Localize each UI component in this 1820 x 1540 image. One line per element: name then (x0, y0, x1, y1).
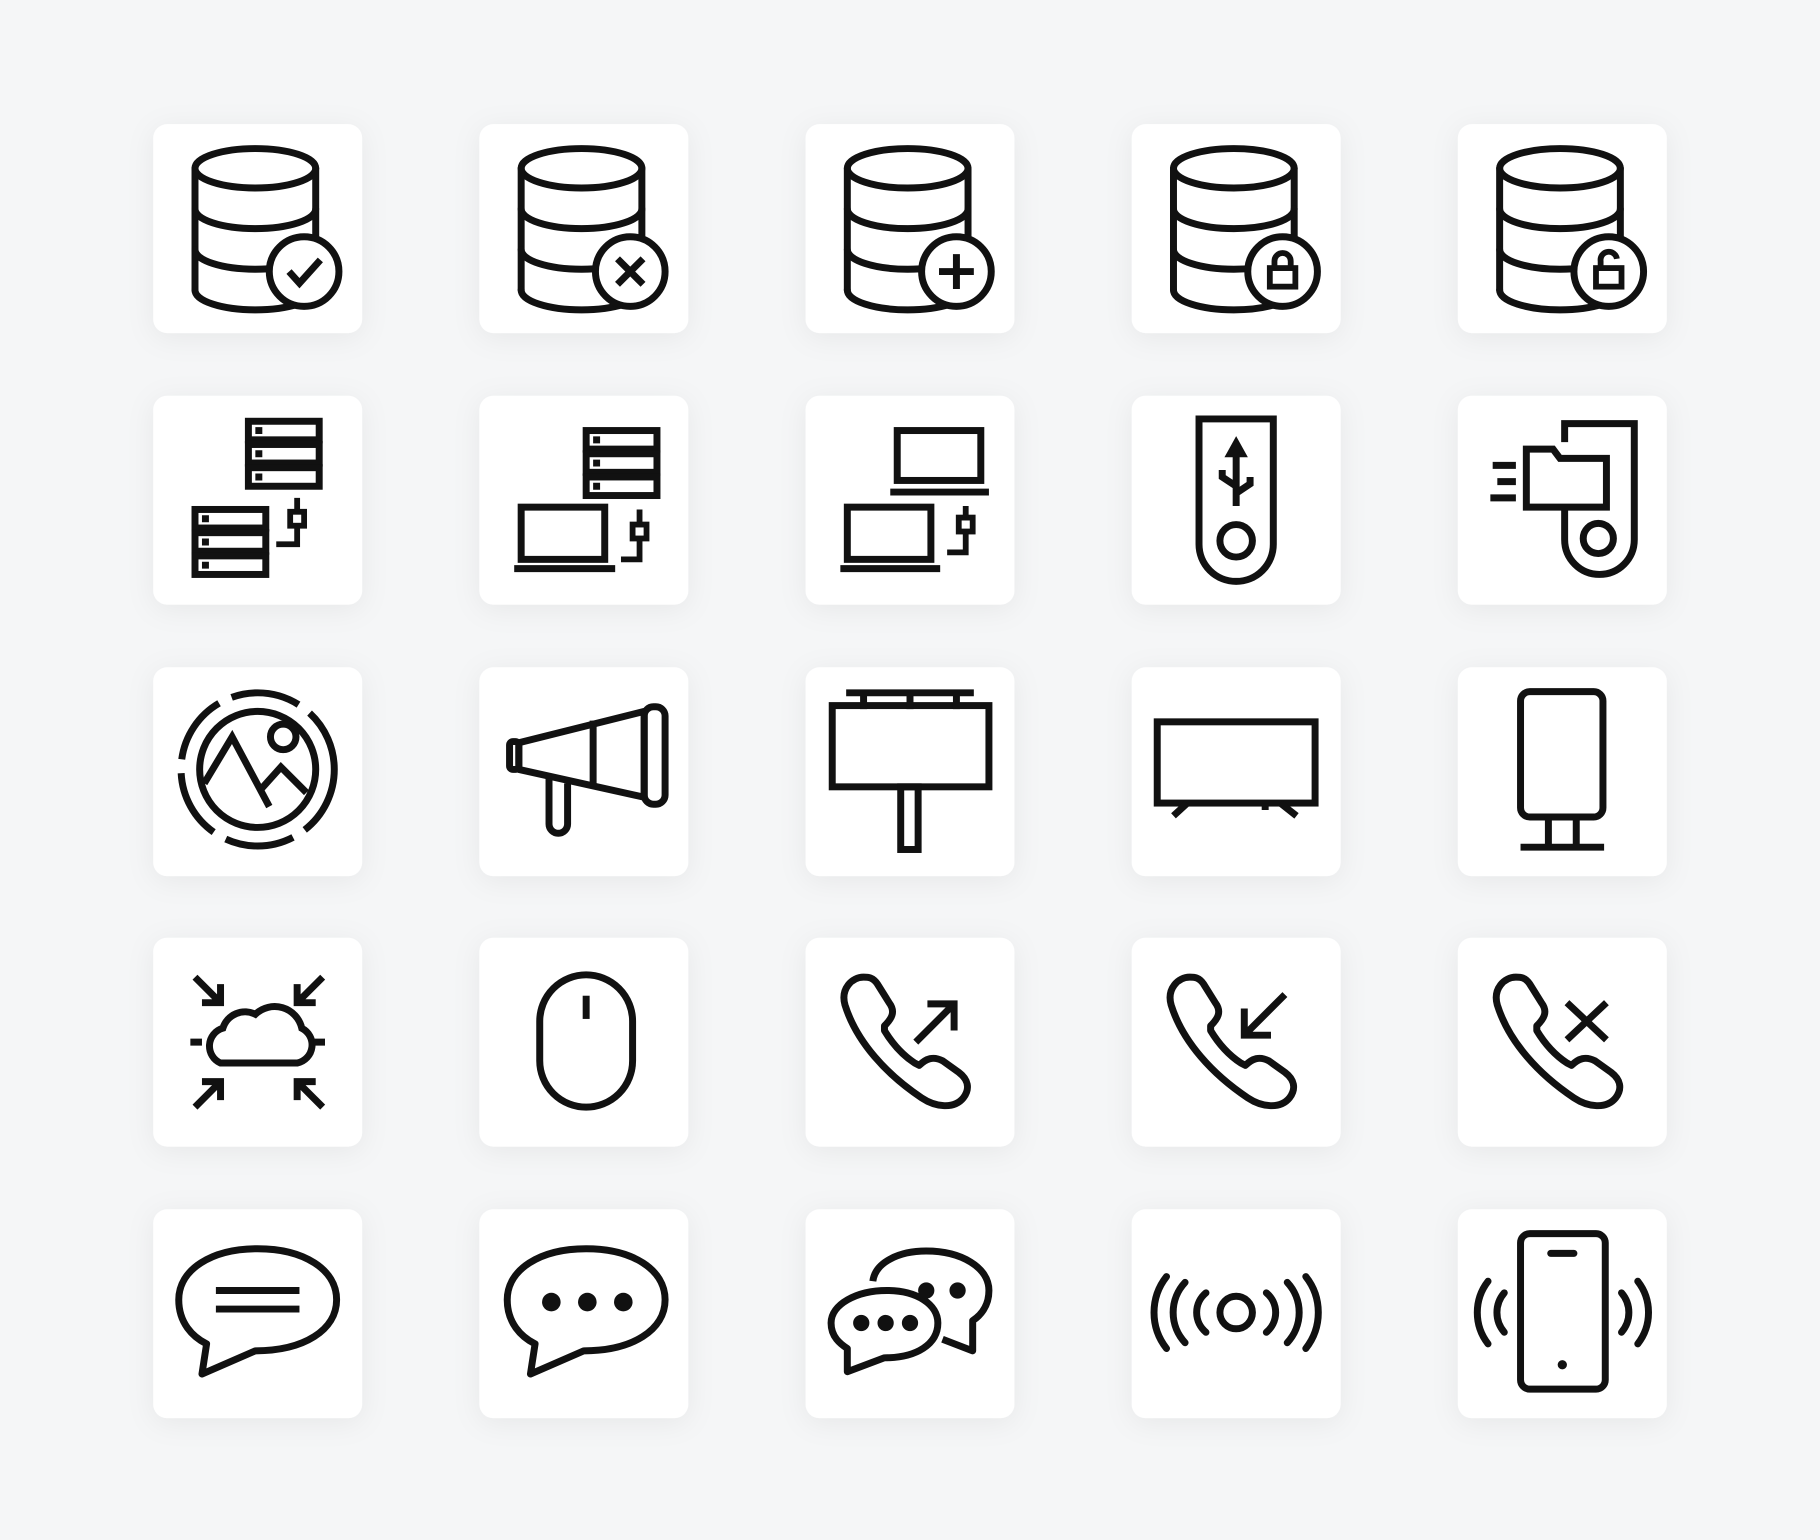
card: database add (806, 124, 1014, 333)
card: billboard (806, 667, 1014, 876)
card: database remove (479, 124, 688, 333)
card: server to server (153, 396, 362, 605)
card: kiosk display (1458, 667, 1667, 876)
card: database unlock (1458, 124, 1667, 333)
card: chat text (153, 1209, 362, 1418)
card: vibrating phone (1458, 1209, 1667, 1418)
card: conversation (806, 1209, 1014, 1418)
card: database check (153, 124, 362, 333)
card: database lock (1132, 124, 1341, 333)
card: outgoing call (806, 938, 1014, 1147)
card: laptop to server (479, 396, 688, 605)
card: image circle (153, 667, 362, 876)
card: mouse (479, 938, 688, 1147)
card: missed call (1458, 938, 1667, 1147)
card: megaphone (479, 667, 688, 876)
card: file transfer (1458, 396, 1667, 605)
card: tv (1132, 667, 1341, 876)
card: incoming call (1132, 938, 1341, 1147)
card: laptop to laptop (806, 396, 1014, 605)
card: cloud compress (153, 938, 362, 1147)
card: chat typing (479, 1209, 688, 1418)
card: broadcast signal (1132, 1209, 1341, 1418)
card: usb drive (1132, 396, 1341, 605)
